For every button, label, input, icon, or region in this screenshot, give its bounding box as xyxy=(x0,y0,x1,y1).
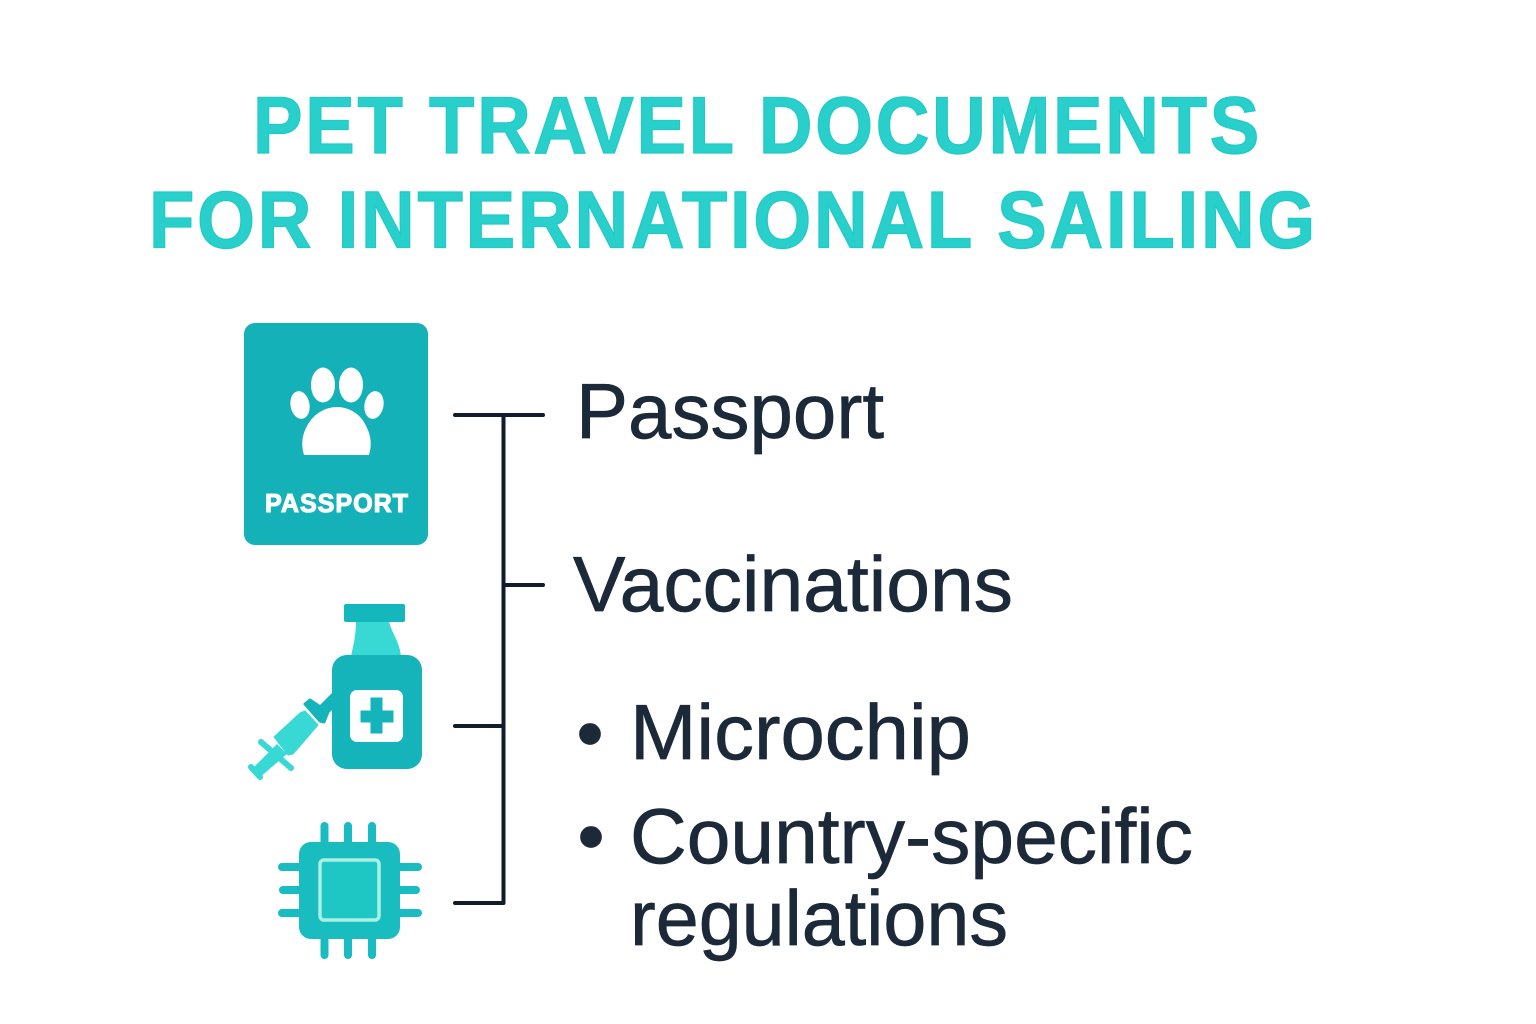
vial body xyxy=(332,655,422,769)
icon: microchip xyxy=(282,826,418,955)
passport label: PASSPORT xyxy=(265,488,409,518)
icon: pet passport xyxy=(244,323,428,545)
chip pins xyxy=(282,826,418,955)
icon: vaccine vial and syringe xyxy=(251,604,422,778)
bullet: country-specific regulations: regulations xyxy=(630,874,1008,962)
title: FOR INTERNATIONAL SAILING xyxy=(149,176,1318,266)
vial neck xyxy=(351,621,401,656)
chip body xyxy=(299,842,400,939)
bullet: microchip: Microchip xyxy=(630,688,971,776)
label: vaccinations: Vaccinations xyxy=(573,540,1013,628)
title xyxy=(149,81,1318,266)
icon: paw print xyxy=(288,368,386,455)
bullet: country-specific regulations xyxy=(580,792,1193,962)
syringe xyxy=(251,691,334,778)
label: passport: Passport xyxy=(576,367,884,455)
vial cap xyxy=(344,604,405,622)
connector bracket xyxy=(455,415,543,903)
medical cross label xyxy=(350,690,403,742)
chip core xyxy=(320,860,379,920)
title: PET TRAVEL DOCUMENTS xyxy=(253,81,1262,171)
bullet: country-specific regulations: Country-specific xyxy=(630,792,1193,880)
